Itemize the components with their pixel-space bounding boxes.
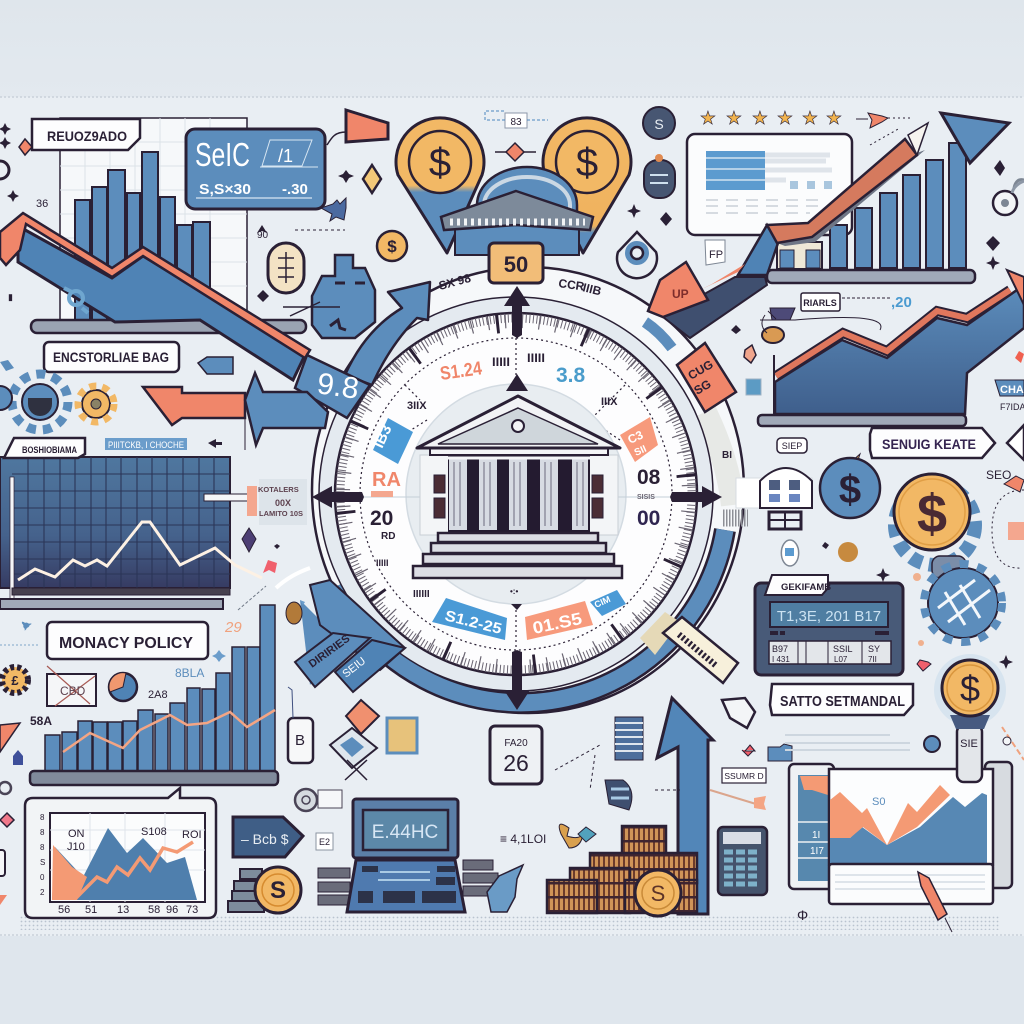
blue readout: T1,3E, 201 B17 — [777, 608, 881, 625]
callout: kotalers note — [204, 479, 307, 525]
icon: pie chart — [109, 673, 137, 701]
panel: seic price board: SeIC — [195, 136, 250, 173]
icon: right orange tag on ring — [677, 343, 736, 412]
small 83 callout — [485, 111, 548, 128]
dotted guide ring — [360, 338, 672, 650]
icon: small e2 note: E2 — [319, 837, 330, 847]
icon: gold coin with halo: $ — [960, 668, 980, 709]
labels: 2 — [40, 888, 45, 897]
mini house bars — [777, 242, 822, 269]
small orange pointer — [856, 113, 912, 145]
right orange value badge: SII — [633, 444, 649, 459]
icon: lower-left district tags: SEIU — [340, 655, 368, 680]
right coin pin — [543, 118, 631, 253]
rising pencil arrow — [663, 123, 928, 338]
orange mountain — [52, 845, 87, 900]
icon: camera — [295, 789, 342, 811]
icon: 9.8 tag with curved arrow — [295, 282, 430, 418]
back panel — [985, 762, 1012, 888]
tablet: 1I — [812, 830, 820, 841]
halftone floor shadow — [20, 916, 1000, 930]
tab label: GEKIFAMB — [781, 582, 831, 593]
callout: kotalers note: KOTALERS — [258, 485, 299, 494]
small gear on arrow — [64, 288, 88, 313]
icon: dark arrow tag — [233, 817, 303, 857]
icon: pill card — [288, 687, 313, 763]
panel: top-left falling chart — [0, 118, 310, 380]
blue mountains — [52, 828, 197, 900]
panel: seic price board — [186, 129, 325, 209]
icon: gold coin with halo — [934, 654, 1006, 729]
outer ring — [312, 267, 744, 713]
icon: dark arrow tag: – Bcb $ — [241, 831, 289, 847]
ring captions — [437, 271, 732, 461]
orange arrow tag — [648, 262, 708, 317]
panel: top-right rising chart — [617, 107, 1024, 338]
dial values: IIIIII — [413, 589, 430, 600]
bottom blue value tag: S1.2-25 — [443, 607, 503, 638]
value tag 50: 50 — [504, 252, 528, 277]
rating stars: ★ — [726, 108, 742, 128]
tick strip — [12, 588, 230, 595]
axis — [773, 355, 775, 415]
right diamond — [1007, 425, 1024, 460]
icon: right orange tag on ring: CUG — [686, 357, 716, 383]
callout: kotalers note: LAMITO 10S — [259, 509, 303, 518]
tab label — [765, 575, 831, 595]
ring captions: IIIB — [581, 280, 603, 299]
panel: lower-left mountain chart — [25, 788, 216, 918]
icon: scatter near money — [781, 540, 1013, 671]
left coin pin: $ — [429, 141, 451, 185]
scatter marks — [627, 160, 1024, 334]
icon: top-left scatter marks: 90 — [257, 230, 269, 241]
right side tag — [995, 380, 1024, 412]
blue area — [830, 793, 987, 863]
report sheet — [687, 134, 852, 235]
labels: 58 — [148, 904, 160, 916]
icon: 26 value tag: FA20 — [504, 738, 528, 749]
small red star — [1015, 351, 1024, 363]
labels: 96 — [166, 904, 178, 916]
panel: bottom-right monitor: S0 — [872, 796, 885, 808]
ring captions: SX 98 — [437, 271, 473, 293]
icon: book stack and coin: S — [270, 877, 286, 904]
small orange house mark — [744, 345, 756, 363]
bank body — [455, 225, 579, 255]
icon: scattered marks lower middle — [500, 735, 940, 848]
base — [0, 599, 223, 609]
label: reuozyado: REUOZ9ADO — [47, 128, 127, 144]
line series — [18, 522, 262, 580]
label: monacy policy: MONACY POLICY — [59, 635, 193, 652]
callout: siep bubble: SIEP — [782, 441, 802, 451]
text: SEO — [986, 468, 1011, 482]
icon: coin stacks: S — [651, 881, 665, 906]
panel: central dial — [312, 267, 748, 713]
cells: SSIL — [833, 644, 853, 654]
chart annotations — [30, 619, 242, 728]
chart base — [767, 270, 975, 283]
cells: 7II — [868, 655, 877, 664]
panel: seic price board: S,S×30 — [199, 181, 251, 198]
icon: striped server — [615, 717, 643, 760]
left coin pin — [396, 118, 484, 253]
labels: 51 — [85, 904, 97, 916]
scatter — [0, 600, 305, 905]
top band — [0, 0, 1024, 97]
icon: central bank building — [413, 396, 622, 578]
left blue value badge: IB3 — [370, 422, 395, 451]
bottom blue value tag — [432, 598, 507, 640]
clip tag — [957, 725, 982, 782]
small blue value tag — [590, 590, 626, 616]
right orange value badge: C3 — [626, 428, 646, 447]
icon: cube cluster — [330, 700, 417, 780]
icon: gear behind big coin — [895, 485, 975, 565]
icon: navy badge — [643, 107, 675, 139]
icon: beige ruler tag — [640, 612, 738, 683]
blue lower arc — [335, 530, 725, 703]
grid sheet — [60, 118, 247, 323]
icon: top-left scatter marks: 36 — [36, 198, 48, 210]
icon: blue gear piggy — [924, 556, 1002, 642]
chart field — [0, 457, 230, 588]
ring captions: BI — [722, 450, 732, 461]
icon: ring ornament — [993, 181, 1024, 215]
icon: orange gear — [78, 386, 114, 422]
small blue value tag: CIM — [593, 594, 612, 610]
dial values: 20 — [370, 507, 393, 530]
label: reuozyado — [32, 119, 140, 150]
icon: calculator — [718, 827, 767, 895]
icon: coin stacks — [547, 826, 697, 916]
labels: 56 — [58, 904, 70, 916]
icon: teardrop eye — [617, 232, 657, 278]
icon: small hat — [760, 308, 881, 330]
trend ribbon — [776, 290, 1010, 376]
labels: ON — [68, 828, 85, 840]
chart base — [31, 320, 306, 333]
icon: crossed envelope — [47, 666, 96, 706]
white axis — [10, 477, 14, 599]
panel: dark grid chart — [0, 438, 262, 609]
icon: right edge dotted orbit — [992, 476, 1024, 568]
chart tag: BOSHIOBIAMA — [22, 445, 77, 456]
rising value label — [801, 293, 912, 311]
inner marker triangle — [506, 374, 528, 391]
labels: ROI — [182, 829, 202, 841]
icon: blue hook — [487, 865, 523, 912]
icon: small gold coin — [377, 231, 407, 261]
chart annotations: 8BLA — [175, 666, 204, 680]
ring captions: CCR — [558, 276, 586, 294]
rating stars: ★ — [777, 108, 793, 128]
icon: small flag — [198, 357, 233, 374]
arrow head — [1007, 270, 1024, 305]
icon: arrowhead tag — [722, 698, 755, 728]
cells: L07 — [834, 655, 848, 664]
panel: rate display board — [755, 575, 903, 675]
labels — [40, 813, 202, 916]
icon: small scatter left of dial — [238, 528, 310, 610]
screen — [829, 769, 993, 865]
small diamond marker — [495, 143, 536, 161]
rising value label: ,20 — [891, 294, 912, 311]
icon: 26 value tag: 26 — [503, 750, 529, 776]
labels: 8 — [40, 828, 45, 837]
bar chart — [75, 152, 210, 320]
blue readout — [770, 602, 888, 627]
tick rings — [340, 318, 692, 670]
icon: token pill — [268, 243, 304, 293]
panel: bottom-right monitor — [789, 725, 1012, 932]
icon: 26 value tag — [490, 726, 542, 784]
callout: siep bubble — [777, 438, 807, 453]
rating stars: ★ — [700, 108, 716, 128]
icon: blue gear — [12, 374, 68, 430]
icon: orange cog left: £ — [11, 673, 19, 688]
rating stars: ★ — [802, 108, 818, 128]
marks: Φ — [797, 907, 808, 923]
callout: kotalers note: 00X — [275, 498, 291, 508]
compass arrow south — [504, 650, 530, 710]
orange area — [830, 785, 950, 845]
orange line — [55, 842, 193, 897]
label: encstorliae bag: ENCSTORLIAE BAG — [53, 350, 169, 365]
entablature — [430, 446, 608, 455]
icon: beige ruler tag: IIIIIIIIIII — [675, 630, 719, 670]
dial values: IIIII — [527, 351, 545, 365]
pediment — [417, 396, 620, 448]
blue triangle — [941, 113, 1009, 163]
icon: scattered marks lower middle: ≡ 4,1LOI — [500, 832, 546, 846]
dial values: 00 — [637, 507, 660, 530]
orange trend line — [63, 710, 275, 752]
panel: lower-left bar and line chart — [0, 600, 305, 905]
icon: lower-right arrow mark — [1002, 727, 1024, 760]
panel: top bank with coin pins — [396, 111, 631, 283]
tablet: 1I7 — [810, 846, 824, 857]
icon: small gold coin: $ — [387, 237, 397, 256]
chart annotations: 29 — [224, 619, 242, 636]
white dial face — [335, 313, 697, 675]
dial values: 3.8 — [556, 364, 586, 387]
bar chart — [830, 143, 966, 268]
plot area — [50, 813, 205, 902]
labels: J10 — [67, 841, 85, 853]
cells: I 431 — [772, 655, 790, 664]
chart annotations: 2A8 — [148, 689, 168, 701]
dial values: 3IIX — [407, 400, 427, 412]
notes strip — [829, 864, 993, 904]
pale middle ring — [319, 297, 713, 691]
icon: money bag — [820, 454, 880, 518]
labels: 13 — [117, 904, 129, 916]
panel: seic price board: /1 — [278, 146, 293, 166]
bottom orange value tag: 01.S5 — [531, 609, 584, 638]
orange arrow tag: UP — [672, 287, 689, 301]
icon: small e2 note — [316, 833, 333, 850]
callout: ssumr d: SSUMR D — [724, 771, 764, 781]
panel: seic price board: -.30 — [282, 181, 308, 198]
pen — [918, 872, 952, 932]
grid — [12, 457, 230, 588]
labels: 8 — [40, 813, 45, 822]
icon: laptop: E.44HC — [372, 822, 438, 843]
blue caption: PIIITCKB, I CHOCHE — [108, 440, 184, 451]
icon: lower-left district tags: DIRIRIES — [307, 633, 352, 670]
wings — [420, 455, 618, 535]
inner pale disc — [406, 384, 626, 604]
label: sendig rate — [870, 428, 995, 458]
dial values: IIIII — [492, 355, 510, 369]
icon: orange cog left — [2, 667, 28, 693]
rating stars: ★ — [826, 108, 842, 128]
dial values: 08 — [637, 466, 661, 489]
icon: orange tag — [327, 110, 388, 145]
right coin pin: $ — [576, 141, 598, 185]
icon: right orange tag on ring: SG — [692, 377, 714, 398]
labels: 73 — [186, 904, 198, 916]
chart tag — [4, 438, 85, 458]
icon: blue gear partial — [0, 386, 12, 410]
small fp note: FP — [709, 249, 723, 261]
area — [775, 285, 1024, 414]
right ribbon segments — [645, 322, 748, 518]
speech frame — [25, 788, 216, 918]
dial values: SISIS — [637, 494, 655, 501]
value tag 50 — [489, 243, 543, 283]
icon: blue up arrow — [657, 698, 713, 914]
icon: big gold coin: $ — [917, 484, 947, 544]
icon: navy badge: S — [654, 116, 664, 132]
icon: lower-left district tags — [295, 580, 405, 692]
rating stars: ★ — [752, 108, 768, 128]
rating stars — [700, 108, 842, 128]
label: sendig rate: SENUIG KEATE — [882, 436, 976, 452]
bank roof — [441, 191, 593, 230]
falling arrow — [0, 213, 310, 380]
panel: right area chart — [744, 270, 1024, 426]
labels: S108 — [141, 826, 167, 838]
dial values: IIIX — [601, 396, 618, 408]
dial values: RA — [372, 469, 401, 491]
labels: 8 — [40, 843, 45, 852]
steps — [413, 533, 622, 578]
bottom band — [0, 936, 1024, 1024]
left blue value badge — [370, 418, 413, 464]
icon: top-left scatter marks — [0, 123, 381, 371]
label: satto setmandal: SATTO SETMANDAL — [780, 693, 905, 710]
small 83 callout: 83 — [510, 117, 522, 128]
bank dome — [477, 167, 577, 225]
icon: nut — [762, 311, 784, 343]
chart base — [30, 771, 278, 785]
colonnade — [448, 452, 590, 532]
icon: blue robot — [283, 255, 375, 338]
labels: 0 — [40, 873, 45, 882]
bottom orange value tag — [525, 601, 593, 640]
dial values: S1.24 — [439, 358, 484, 385]
labels: S — [40, 858, 45, 867]
clip tag: SIE — [960, 738, 978, 750]
chart base — [758, 415, 966, 426]
icon: top-left scatter marks: ▮ — [8, 292, 13, 302]
dial values: RD — [381, 531, 395, 542]
icon: money bag: $ — [839, 468, 861, 512]
chart annotations: 58A — [30, 714, 52, 728]
compass arrow west — [312, 486, 364, 508]
icon: big gold coin — [894, 474, 970, 550]
cells — [769, 641, 891, 664]
small fp note — [705, 240, 725, 265]
label: satto setmandal — [770, 684, 913, 715]
cells: SY — [868, 644, 880, 654]
icon: blue square — [746, 379, 761, 395]
icon: book stack and coin — [228, 867, 301, 913]
icon: navy jar — [644, 154, 675, 198]
label: encstorliae bag — [44, 342, 179, 372]
label: monacy policy — [47, 622, 208, 659]
icon: brown nut — [286, 602, 302, 624]
icon: blue left arrow — [245, 373, 328, 445]
dial values: IIIII — [376, 558, 389, 568]
compass arrow north — [504, 286, 530, 338]
compass arrow east — [670, 486, 722, 508]
icon: laptop — [318, 799, 498, 912]
cells: B97 — [772, 644, 788, 654]
dial values: •:• — [510, 587, 518, 596]
callout: ssumr d — [710, 768, 766, 810]
icon: 9.8 tag with curved arrow: 9.8 — [315, 367, 361, 406]
right orange value badge — [620, 417, 658, 462]
icon: orange left arrow — [143, 387, 245, 425]
icon: mini house — [736, 468, 812, 529]
icon: crossed envelope: CBD — [60, 684, 86, 698]
tablet — [789, 764, 834, 889]
bar chart — [45, 605, 275, 771]
rising value label: RIARLS — [803, 298, 837, 308]
icon: pill card: B — [295, 732, 305, 749]
dial values — [370, 351, 661, 640]
